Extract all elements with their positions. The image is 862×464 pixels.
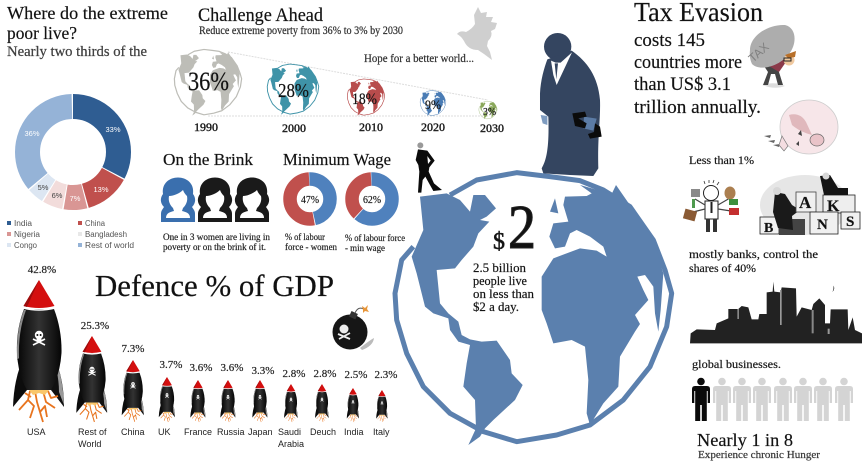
caption: 2.5 billion people: 2.5 billion xyxy=(473,261,527,275)
percent labels: 3.6% xyxy=(221,362,243,374)
percent labels: 2.8% xyxy=(283,368,305,380)
caption: labour force women xyxy=(285,232,337,253)
globe 1990: 36% xyxy=(174,49,242,116)
percent labels: 7.3% xyxy=(122,343,144,355)
panel: central globe xyxy=(395,33,672,445)
rocket: USA xyxy=(13,280,64,422)
heading: where do the extreme poor live: Where do the extreme xyxy=(7,3,168,23)
country labels: Saudi xyxy=(278,427,301,437)
donut chart: extreme poor by country: 5% xyxy=(38,183,49,192)
text: tax evasion cost: costs 145 xyxy=(634,30,705,51)
year labels: 2000 xyxy=(282,121,306,135)
icon: bank blocks: A xyxy=(799,193,812,212)
text: less than 1%: Less than 1% xyxy=(689,153,754,167)
percent labels: 2.3% xyxy=(375,369,397,381)
caption: 2.5 billion people xyxy=(473,261,535,314)
caption: one in 3 women xyxy=(163,233,270,253)
country labels: Italy xyxy=(373,427,390,437)
dollar figure: $ xyxy=(493,229,505,255)
country labels: India xyxy=(344,427,364,437)
panel: on the brink xyxy=(161,150,270,253)
rocket: China xyxy=(122,360,144,422)
rocket: Japan xyxy=(252,380,267,422)
chart legend: Bangladesh xyxy=(85,230,127,239)
caption: labour force min wage: - min wage xyxy=(345,244,385,254)
text: tax evasion cost xyxy=(634,30,761,118)
text: mostly banks xyxy=(689,247,818,275)
panel: where do the extreme poor live xyxy=(7,3,168,250)
rocket: Rest of World xyxy=(76,336,107,422)
percent labels: 3.6% xyxy=(190,362,212,374)
country labels: USA xyxy=(27,427,46,437)
icon: dove xyxy=(457,7,497,60)
rocket: Deuch xyxy=(315,384,329,422)
text: global businesses: global businesses. xyxy=(692,357,781,371)
icon: bomb xyxy=(332,305,374,350)
percent labels: 2.8% xyxy=(314,368,336,380)
donut chart: extreme poor by country: 33% xyxy=(105,125,121,134)
globe 2020: 9%: 9% xyxy=(425,97,441,112)
globe 2010: 18%: 18% xyxy=(352,91,377,108)
text: tax evasion cost: than US$ 3.1 xyxy=(634,74,731,95)
panel: challenge ahead xyxy=(174,5,504,135)
icon: man carrying tax rock: TAX xyxy=(746,40,772,65)
percent labels: 42.8% xyxy=(28,264,56,276)
rocket: Saudi Arabia xyxy=(284,384,298,422)
globe 1990: 36%: 36% xyxy=(188,67,229,96)
heading: minimum wage: Minimum Wage xyxy=(283,150,391,169)
globe 2030: 3% xyxy=(479,101,497,119)
heading: defence % of GDP: Defence % of GDP xyxy=(95,268,334,303)
globe 2000: 28%: 28% xyxy=(278,80,309,102)
trend lines xyxy=(208,52,488,116)
donut: 62% min wage: 62% xyxy=(363,194,381,206)
donut chart: extreme poor by country: 7% xyxy=(70,194,81,203)
caption: one in 3 women: One in 3 women are living in xyxy=(163,233,270,243)
icon: upturned piggy bank xyxy=(764,100,838,154)
panel: minimum wage xyxy=(283,150,405,254)
panel: defence percent of GDP xyxy=(13,264,397,449)
country labels: World xyxy=(78,439,101,449)
globe 2020: 9% xyxy=(420,91,446,116)
icon row: three women xyxy=(161,178,269,222)
heading: where do the extreme poor live xyxy=(7,3,168,43)
caption: one in 3 women: poverty or on the brink of it. xyxy=(163,242,266,253)
percent labels: 2.5% xyxy=(345,369,367,381)
subheading: chronic hunger: Experience chronic Hunger xyxy=(698,450,821,461)
chart legend: Rest of world xyxy=(85,241,134,250)
country labels: Rest of xyxy=(78,427,107,437)
text: mostly banks: shares of 40% xyxy=(689,261,756,275)
illustration: city skyline xyxy=(690,282,862,343)
heading: where do the extreme poor live: poor live? xyxy=(7,23,77,43)
icon: bank blocks: K xyxy=(827,198,840,215)
icon: bank blocks xyxy=(760,172,860,236)
year labels: 2020 xyxy=(421,120,445,134)
rocket: India xyxy=(347,388,359,422)
rocket: France xyxy=(190,380,205,422)
caption: 2.5 billion people: on less than xyxy=(473,287,535,301)
year labels: 2010 xyxy=(359,120,383,134)
globe 2030: 3%: 3% xyxy=(483,106,496,118)
percent labels xyxy=(28,264,397,381)
chart legend: Nigeria xyxy=(14,230,41,239)
caption: hope for a better world: Hope for a better world... xyxy=(364,51,474,65)
icon: bank blocks: S xyxy=(846,214,854,230)
caption: labour force women: force - women xyxy=(285,242,337,253)
caption: 2.5 billion people: $2 a day. xyxy=(473,300,519,314)
dollar figure: 2 xyxy=(508,194,536,262)
text: mostly banks: mostly banks, control the xyxy=(689,247,818,261)
percent labels: 3.7% xyxy=(160,359,182,371)
country labels: France xyxy=(184,427,212,437)
heading: on the brink: On the Brink xyxy=(163,150,253,169)
heading: challenge ahead: Challenge Ahead xyxy=(198,5,323,26)
caption: labour force min wage xyxy=(345,233,405,254)
donut chart: extreme poor by country: 36% xyxy=(24,129,40,138)
donut: 47% women: 47% xyxy=(301,194,319,206)
year labels: 1990 xyxy=(194,120,218,134)
icon: money man xyxy=(683,180,739,232)
dollar figure xyxy=(493,194,536,262)
country labels: UK xyxy=(158,427,171,437)
pictogram: 1 in 8 people xyxy=(692,378,853,421)
year labels: 2030 xyxy=(480,121,504,135)
caption: 2.5 billion people: people live xyxy=(473,274,527,288)
subheading: Nearly two thirds of the xyxy=(7,44,147,60)
rocket: Italy xyxy=(376,390,388,422)
chart legend: India xyxy=(14,219,33,228)
country labels xyxy=(27,427,390,449)
icon: bank blocks: B xyxy=(764,221,773,236)
chart legend: Congo xyxy=(14,241,38,250)
globe 2010: 18% xyxy=(347,79,385,116)
icon: man carrying tax rock xyxy=(746,25,796,88)
globe 2000: 28% xyxy=(267,64,319,115)
rocket: UK xyxy=(159,377,175,422)
percent labels: 25.3% xyxy=(81,320,109,332)
caption: labour force min wage: % of labour force xyxy=(345,233,405,244)
caption: labour force women: % of labour xyxy=(285,232,326,243)
country labels: Russia xyxy=(217,427,245,437)
globe: world map xyxy=(395,173,672,445)
year labels xyxy=(194,120,504,135)
donut chart: extreme poor by country: 13% xyxy=(93,185,109,194)
donut chart: extreme poor by country: 6% xyxy=(52,191,63,200)
rockets chart xyxy=(13,280,388,422)
rocket: Russia xyxy=(220,380,235,422)
text: tax evasion cost: trillion annually. xyxy=(634,97,761,118)
country labels: Arabia xyxy=(278,439,304,449)
chart legend: China xyxy=(85,219,106,228)
panel: tax evasion xyxy=(634,0,862,461)
donut chart: extreme poor by country xyxy=(24,106,121,203)
country labels: Japan xyxy=(248,427,273,437)
percent labels: 3.3% xyxy=(252,365,274,377)
chart legend xyxy=(7,219,134,250)
heading: nearly 1 in 8: Nearly 1 in 8 xyxy=(697,430,793,450)
text: tax evasion cost: countries more xyxy=(634,52,742,73)
figure: small man in suit xyxy=(416,142,442,193)
subheading: reduce extreme poverty: Reduce extreme poverty from 36% to 3% by 2030 xyxy=(199,25,403,37)
country labels: Deuch xyxy=(310,427,336,437)
figure: man in dark coat xyxy=(540,33,602,176)
icon: bank blocks: N xyxy=(817,217,828,233)
country labels: China xyxy=(121,427,145,437)
